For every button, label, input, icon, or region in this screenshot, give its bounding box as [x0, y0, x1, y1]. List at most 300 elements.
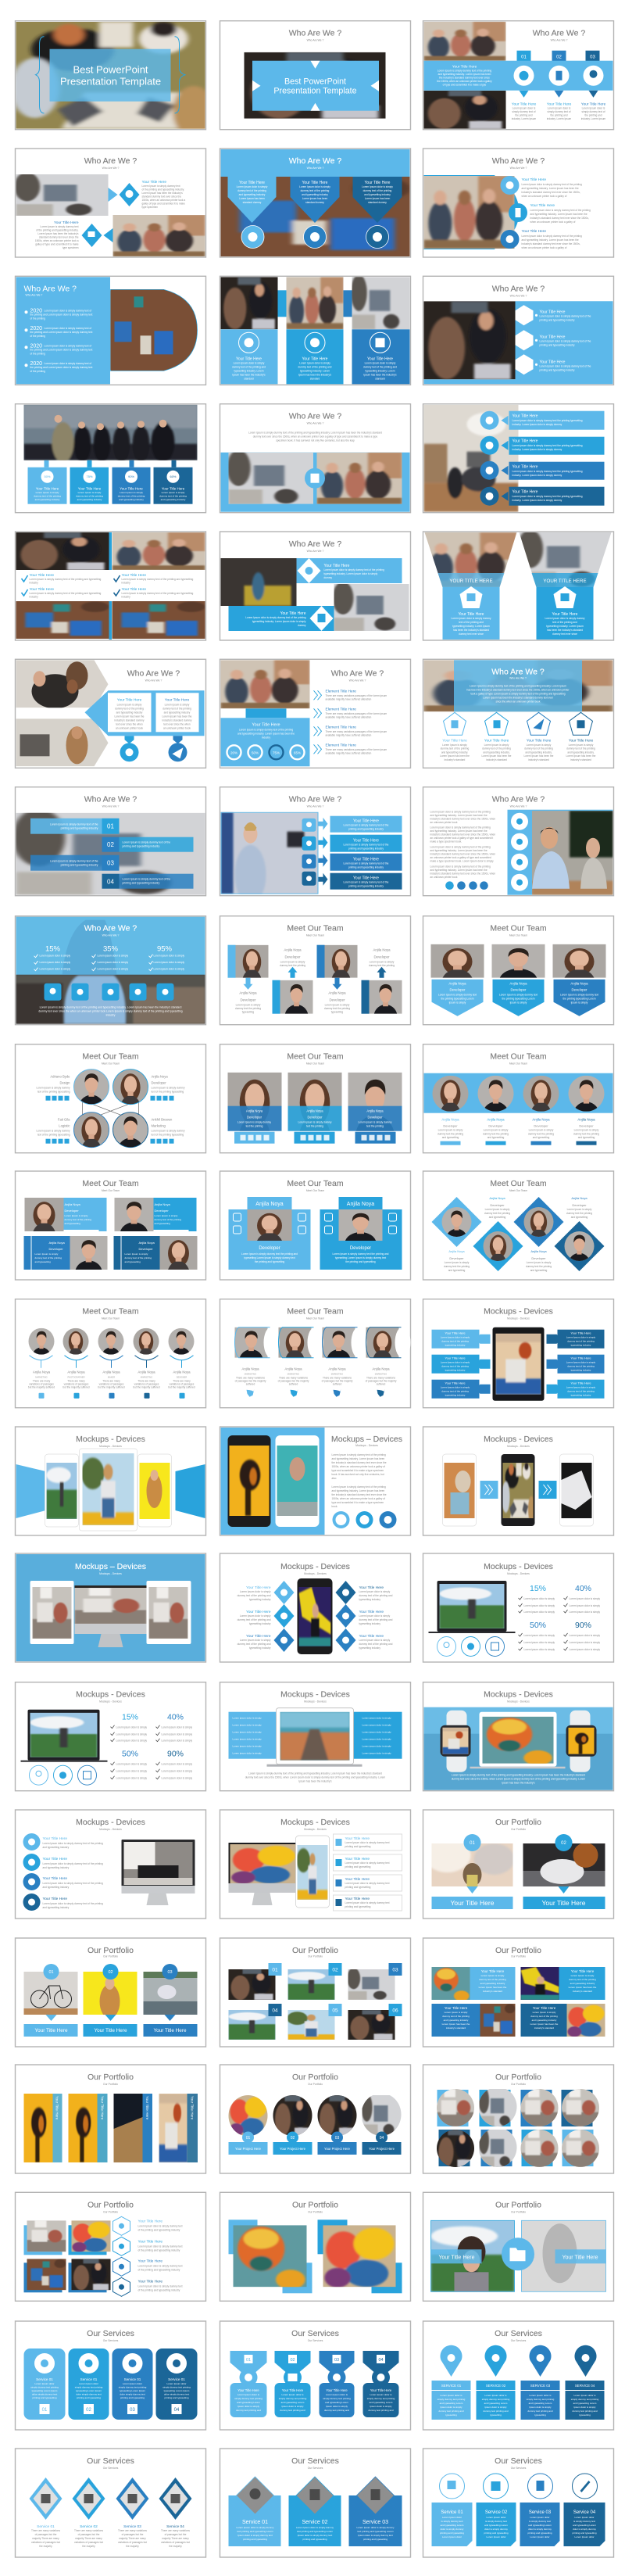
text: Ipsum dolor is simply	[326, 2405, 348, 2408]
percentages	[111, 1713, 192, 1780]
heading: Who Are We ?	[331, 668, 384, 678]
panels: has been the industry's standard	[453, 629, 489, 632]
heading: Who Are We ?	[510, 294, 527, 297]
text: simply dummy text printing	[367, 2397, 395, 2400]
slide 58: services stacked diamonds	[16, 2449, 206, 2557]
slide 44: monitor, phone and checklist cards: printing and typesetting	[345, 1905, 371, 1908]
overlays: Lorem Ipsum is simply dummy	[298, 1121, 332, 1124]
text: and typesetting Lorem	[370, 2401, 393, 2404]
percentages: Lorem ipsum dolor is simply	[569, 1634, 600, 1637]
body: and typesetting industry. Lorem Ipsum has been	[331, 1489, 385, 1492]
blue panel: 2020	[30, 361, 42, 367]
slide 25: four ovals connected	[16, 1044, 206, 1153]
stat cards: Your Title Here	[36, 487, 59, 491]
text: Your Title Here	[539, 310, 566, 314]
description boxes: and typesetting Lorem	[573, 2402, 597, 2405]
blue panel: Lorem Ipsum dolor is simply dummy text of	[44, 309, 91, 312]
checklist band: industry	[122, 596, 130, 599]
heading: Meet Our Team	[82, 1052, 139, 1062]
percent stats: Lorem ipsum dolor is simply	[97, 968, 128, 971]
text: Lorem Ipsum dolor is simply	[240, 1614, 271, 1618]
panels	[438, 573, 598, 640]
heading: Our Portfolio	[308, 1954, 323, 1958]
heading: Meet Our Team	[82, 1307, 139, 1317]
heading: Who Are We ?	[307, 422, 324, 425]
card text	[34, 1202, 181, 1263]
text: Your Title Here	[527, 738, 552, 743]
percentages: Lorem ipsum dolor is simply	[523, 1610, 555, 1614]
text: Service 02	[485, 2510, 508, 2515]
heading: Meet Our Team	[490, 1179, 547, 1188]
slide 21: text, icon column and photo	[423, 787, 614, 896]
captions: and typesetting	[488, 1136, 505, 1139]
round photos	[437, 2087, 599, 2167]
heading: Mockups - Devices	[304, 1572, 327, 1575]
slide 19: numbered bars over photo	[12, 787, 205, 896]
text blocks: 1500s, when an unknown printer took a	[142, 199, 185, 202]
caption: Lorem Ipsum is simply dummy text of the printing and typesetting industry. Lorem Ipsum has been the industry's standard	[452, 1774, 585, 1777]
text: and typesetting industry. Lorem Ipsum has been the	[522, 187, 579, 190]
heading: Mockups - Devices	[484, 1562, 553, 1571]
text: industry's standard dummy text ever since the 1500s,	[522, 191, 580, 194]
captions: Developer	[443, 1124, 458, 1128]
boxes	[330, 816, 402, 890]
step text: the printing and	[516, 114, 533, 117]
text: Your Title Here	[246, 1585, 271, 1590]
step text: simply dummy text of	[512, 110, 536, 113]
list: Your Title Here	[42, 1897, 67, 1901]
checklist band: Your Title Here	[30, 587, 54, 592]
text: Your Title Here	[238, 2388, 259, 2392]
text blocks: Lorem Ipsum is simply dummy text	[40, 225, 79, 228]
stat cards: dummy text of the printing	[159, 495, 187, 498]
captions: of passages but the majority	[366, 1380, 397, 1383]
slide 2: cover variant	[220, 21, 411, 130]
description boxes: Lorem Ipsum dolor is	[529, 2394, 552, 2397]
panels: Ipsum has been the industry's	[232, 373, 266, 376]
slide 44: monitor, phone and checklist cards: Lorem Ipsum dolor is simply dummy text	[345, 1901, 390, 1904]
text: Your Title Here	[359, 1610, 384, 1614]
stat cards	[28, 468, 192, 504]
card text: industry's standard	[483, 1990, 502, 1993]
captions: typesetting Lorem Ipsum is simply dummy text	[335, 1256, 386, 1259]
slide 15: funnel photos	[423, 530, 614, 640]
text: Lorem Ipsum dolor is simply dummy text of the	[539, 339, 591, 342]
panels	[228, 1197, 402, 1270]
text: when an unknown printer took a galley of	[530, 220, 576, 224]
body: Lorem Ipsum is simply dummy text of the printing	[331, 1485, 386, 1489]
slide 33: tablet with six boxes	[423, 1299, 614, 1408]
text: printing and typesetting	[440, 2531, 464, 2535]
captions: Developer	[350, 1246, 371, 1251]
list panels: Lorem ipsum dolor is simply	[233, 1731, 262, 1734]
text: simply dummy text printing	[162, 2386, 191, 2389]
stat cards: Your Title Here	[162, 487, 185, 491]
stat cards: dummy text of the printing	[34, 495, 61, 498]
captions: There are many variations	[366, 1377, 395, 1380]
oval icons	[480, 411, 508, 506]
percent stats: Lorem ipsum dolor is simply	[153, 968, 184, 971]
captions: Anjila Noya	[530, 1249, 547, 1253]
text: dummy text of the printing	[441, 747, 470, 750]
card text: Lorem Ipsum has been the	[530, 2022, 559, 2026]
names: Lorem Ipsum is simply	[370, 961, 395, 964]
captions: dummy text the printing	[438, 1133, 463, 1136]
names: Anjila Noya	[284, 948, 302, 952]
text: dummy text of the printing and	[238, 1643, 271, 1646]
phone	[297, 1578, 333, 1654]
heading: Who Are We ?	[551, 39, 568, 42]
card text: dummy text of the printing	[155, 1218, 181, 1221]
captions: the printing and typesetting	[345, 1260, 376, 1263]
captions: Anjila Noya	[487, 1118, 505, 1122]
overlays: text the printing	[246, 1125, 263, 1128]
stat cards: Your Title Here	[78, 487, 102, 491]
photo	[423, 660, 612, 711]
stat cards: 50%	[44, 475, 51, 478]
bars: printing and typesetting industry	[122, 882, 160, 885]
text: dummy text of the printing and	[359, 1594, 393, 1597]
card text: Lorem Ipsum is simply	[481, 1974, 505, 1977]
captions: and typesetting	[578, 1136, 595, 1139]
body text: Lorem Ipsum dolor is simply dummy text of the printing	[430, 811, 491, 814]
heading: Our Services	[291, 2329, 339, 2338]
captions: Lorem Ipsum is simply dummy	[36, 1130, 70, 1133]
captions: There are many	[67, 1380, 85, 1383]
project bars: Your Project Here	[235, 2147, 262, 2151]
panels: Lorem Ipsum dolor is simply dummy	[451, 617, 491, 620]
text: and typesetting industry.	[483, 751, 510, 754]
photo	[220, 811, 319, 894]
caption: dummy text ever since the when an unknown printer took Lorem Ipsum is simply dummy text of the printing and typesetting	[38, 1010, 183, 1013]
folder icon	[502, 2237, 534, 2270]
percent stats: 95%	[157, 945, 173, 954]
slide 32: arc framed portraits	[220, 1299, 411, 1408]
cards: Your Title Here	[117, 697, 142, 702]
heading: Who Are We ?	[289, 539, 341, 549]
arrows	[244, 967, 386, 990]
laptop	[470, 1712, 566, 1768]
text: simply dummy text printing	[30, 2386, 59, 2389]
step text: industry. Lorem Ipsum	[547, 117, 571, 120]
heading: Meet Our Team	[306, 1317, 324, 1320]
card text: Lorem Ipsum is simply	[533, 2011, 556, 2014]
title box: Best PowerPoint	[73, 64, 148, 76]
text: of passages but the	[35, 2533, 57, 2536]
number tiles: 02	[86, 2408, 91, 2413]
intro text: Lorem Ipsum is simply dummy text of the printing and typesetting industry. Lorem Ipsum has been the industry's standard	[248, 432, 382, 435]
text: printing and typesetting industry	[539, 343, 575, 346]
heading: Meet Our Team	[102, 1062, 120, 1066]
text: dummy text of the printing	[482, 747, 511, 750]
boxes: Your Title Here	[353, 839, 379, 844]
slide 49: portfolio vertical strips	[16, 2065, 206, 2173]
slide 17: photo with donuts and list	[220, 659, 411, 768]
card text: Lorem Ipsum has been the	[479, 1986, 507, 1989]
text	[238, 1585, 393, 1650]
heading: Who Are We ?	[492, 795, 545, 804]
text: Lorem Ipsum dolor	[442, 2516, 462, 2519]
pointers	[45, 2015, 56, 2021]
slide 35: phones on blue panel	[220, 1427, 411, 1535]
number tiles: 01	[42, 2408, 48, 2413]
panels: standard	[244, 377, 254, 380]
list: Your Title Here	[42, 1836, 67, 1841]
names: Anjila Noya	[373, 948, 391, 952]
panels	[228, 2495, 402, 2546]
slide 37: monitor and tablets on blue	[16, 1553, 206, 1662]
text: Your Title Here	[246, 1610, 271, 1614]
box text: Lorem Ipsum dolor is simply	[441, 1386, 470, 1389]
text: Service 04	[573, 2510, 596, 2515]
diamonds	[273, 1581, 356, 1652]
text: industry's standard dummy text ever since the 1500s,	[530, 217, 589, 220]
label bars: SERVICE 01	[441, 2384, 462, 2388]
portraits	[247, 1209, 383, 1241]
heading: Who Are We ?	[102, 167, 120, 170]
number tabs: 02	[332, 1967, 338, 1973]
percentages: Lorem ipsum dolor is simply	[523, 1648, 555, 1651]
blue panel: of the printing	[30, 370, 45, 373]
text: Your Title Here	[530, 203, 555, 208]
list: available majority have suffered alteration	[325, 751, 371, 754]
description boxes: and typesetting Lorem	[484, 2402, 508, 2405]
slide 57: services map pins	[423, 2321, 614, 2430]
text: the majority	[82, 2545, 95, 2548]
list: Element Title Here	[325, 743, 356, 747]
blue panel: 50%	[252, 751, 259, 754]
text: There are many variations	[118, 2529, 147, 2532]
cards: an unknown printer book	[116, 726, 143, 729]
captions	[438, 1118, 599, 1145]
body text: Lorem Ipsum dolor is simply dummy text of the printing	[430, 826, 491, 829]
captions: Lorem Ipsum is simply	[527, 1261, 552, 1264]
list: Your Title Here	[42, 1876, 67, 1881]
pointer panels: Developer	[571, 988, 588, 992]
social bars	[234, 1132, 395, 1144]
photos	[228, 1968, 395, 2040]
watches	[441, 1711, 597, 1772]
number tiles: 04	[378, 2358, 384, 2363]
bars: Your Title Here	[512, 465, 538, 470]
list: available majority have suffered alteration	[325, 733, 371, 736]
slide 44: monitor, phone and checklist cards: Your Title Here	[345, 1836, 370, 1841]
slide 45: portfolio two items	[423, 1810, 614, 1919]
boxes: Lorem Ipsum is simply dummy text of the	[344, 881, 389, 884]
step text: the printing and	[551, 114, 568, 117]
percentages: Lorem ipsum dolor is simply	[116, 1763, 147, 1766]
heading: Our Services	[511, 2339, 527, 2342]
pointer panels: the printing typesetting Lorem	[441, 998, 474, 1001]
text: Service 01	[124, 2377, 141, 2381]
text: Service 01	[36, 2377, 53, 2381]
arrow panel	[84, 690, 205, 736]
text: Lorem Ipsum dolor	[79, 2382, 98, 2385]
description boxes: dummy text printing and	[572, 2409, 598, 2413]
heading: Mockups - Devices	[76, 1690, 145, 1700]
heading: Our Portfolio	[292, 2200, 338, 2209]
panels	[220, 329, 409, 384]
pointers: and typesetting industry	[302, 193, 328, 196]
boxes: printing and typesetting industry	[348, 847, 384, 851]
card text: industry's standard	[534, 2026, 554, 2030]
step text: Lorem Ipsum dolor is	[548, 107, 571, 110]
text: Service 04	[166, 2524, 184, 2529]
photos	[233, 2225, 395, 2289]
captions: and typesetting	[489, 1216, 506, 1219]
text: There are many variations	[31, 2529, 60, 2532]
text: and typesetting Lorem	[573, 2524, 596, 2527]
text: Your Title Here	[539, 335, 566, 339]
number badges: 02	[561, 1841, 566, 1846]
cards: Lorem Ipsum has been the	[115, 715, 145, 718]
text: simply dummy text printing	[279, 2397, 307, 2400]
number tiles: 03	[334, 2358, 339, 2363]
text: majority There are many	[119, 2537, 146, 2540]
captions: Anjila Noya	[577, 1118, 595, 1122]
rounded photo	[423, 175, 519, 249]
body: the industry's standard dummy text ever since the	[331, 1461, 387, 1464]
text: Lorem Ipsum dolor	[486, 2516, 506, 2519]
card text: Your Title Here	[533, 2006, 556, 2010]
text: dummy text of the printing	[524, 747, 553, 750]
captions: MARKETING	[288, 1373, 299, 1376]
description boxes: simply dummy text printing	[438, 2398, 466, 2401]
step text: Your Title Here	[547, 102, 572, 107]
list: Lorem Ipsum dolor is simply dummy text of the printing	[42, 1882, 103, 1885]
list panels: Lorem ipsum dolor is simply	[233, 1717, 262, 1720]
body text: and typesetting industry. Lorem Ipsum has been the	[430, 869, 488, 872]
list: Element Title Here	[325, 707, 356, 711]
box text: typesetting industry	[571, 1394, 591, 1397]
text	[31, 2524, 190, 2548]
description boxes: Lorem Ipsum dolor is	[573, 2394, 596, 2397]
text: typesetting industry	[359, 1646, 380, 1650]
columns	[23, 2348, 197, 2420]
body text: Lorem Ipsum dolor is simply dummy text of the printing	[430, 846, 491, 849]
list: There are many variations passages of the lorem ipsum	[325, 694, 388, 697]
captions: Developer	[488, 1124, 503, 1128]
photos	[23, 2094, 188, 2162]
boxes: printing and typesetting industry	[348, 828, 384, 831]
text: industry's standard	[486, 758, 507, 761]
card text: Your Title Here	[571, 1969, 595, 1973]
card text: Lorem Ipsum is simply	[445, 2011, 468, 2014]
rounded photo	[111, 289, 197, 371]
caption: industry	[106, 1014, 116, 1017]
blue panel: Who Are We ?	[23, 284, 77, 293]
heading: Who Are We ?	[307, 805, 324, 808]
text: Lorem Ipsum dolor is simply	[359, 1639, 391, 1642]
cards: and typesetting industry	[116, 711, 143, 714]
overlay: Who Are We ?	[491, 667, 545, 676]
panels: typesetting industry. Lorem Ipsum	[452, 625, 490, 628]
laptop	[267, 1708, 362, 1767]
icons	[500, 176, 527, 249]
text: Lorem Ipsum is simply	[527, 743, 552, 747]
text: dummy text of the printing and	[359, 1618, 393, 1621]
outline icons	[30, 1765, 97, 1785]
slide 22: stats over photo	[16, 916, 206, 1025]
slide 44: monitor, phone and checklist cards: Your Title Here	[345, 1857, 370, 1861]
stat cards: 90%	[128, 475, 134, 478]
text: Lorem Ipsum dolor	[530, 2535, 550, 2538]
text: Your Title Here	[138, 2219, 162, 2223]
text: the majority	[169, 2545, 182, 2548]
text: printing and typesetting	[302, 2538, 327, 2541]
pins	[441, 2345, 597, 2377]
percent stats: Lorem ipsum dolor is simply	[153, 961, 184, 964]
percent stats: 15%	[45, 945, 61, 954]
pointer panels: Anjila Noya	[509, 982, 527, 986]
stat cards: Your Title Here	[120, 487, 143, 491]
slide 9: photo with hexagons	[423, 276, 614, 385]
slide 59: services three panels	[220, 2449, 411, 2557]
text: Service 03	[529, 2510, 552, 2515]
title box: Presentation Template	[60, 76, 161, 88]
text: variations of passages but	[74, 2541, 103, 2544]
heading: Who Are We ?	[492, 156, 545, 166]
box text: typesetting industry	[445, 1394, 466, 1397]
blue bars: Your Title Here	[323, 564, 350, 568]
slide 8: three photo columns	[220, 274, 411, 385]
text: of passages but the	[165, 2533, 187, 2536]
pointers: Lorem Ipsum has been	[302, 197, 328, 200]
bars: printing and typesetting industry	[61, 864, 98, 867]
text: of the printing and typesetting industry	[138, 2288, 180, 2291]
heading: Meet Our Team	[509, 1189, 527, 1192]
percent stats: Lorem ipsum dolor is simply	[39, 968, 70, 971]
tablets	[30, 1581, 191, 1644]
card text: Lorem Ipsum is simply	[155, 1214, 178, 1217]
text: Service 01	[37, 2524, 55, 2529]
bars: industry. Lorem Ipsum dolor is simply dummy	[512, 474, 562, 477]
caption: Ipsum has been the industry's	[298, 1780, 332, 1783]
overlays	[431, 2249, 606, 2263]
monitor	[228, 1843, 297, 1905]
slide 16: arrow panel with photos	[16, 659, 206, 768]
card text: industry's standard	[573, 1990, 592, 1993]
text: of the printing and typesetting industry	[138, 2268, 180, 2271]
text: and typesetting industry.	[567, 751, 595, 754]
text: Your Title Here	[522, 177, 546, 182]
text: Your Title Here	[359, 1634, 384, 1639]
captions: MAKER	[108, 1376, 115, 1379]
description boxes: Ipsum dolor is simply	[484, 2406, 507, 2409]
description boxes: dummy text printing and	[483, 2409, 509, 2413]
step text: industry. Lorem Ipsum	[512, 117, 536, 120]
card text: industry's standard	[446, 2026, 466, 2030]
pointer panels: Developer	[510, 988, 527, 992]
bars: 04	[107, 879, 114, 886]
slide 30: diamond portraits	[423, 1171, 614, 1280]
blue overlay: Who Are We ?	[84, 924, 137, 933]
body text: and typesetting industry. Lorem Ipsum has been the	[430, 829, 488, 833]
heading: Who Are We ?	[102, 805, 120, 808]
captions: and typesetting	[442, 1136, 459, 1139]
text: of passages but the	[122, 2533, 144, 2536]
checklist band: Your Title Here	[122, 573, 146, 578]
heading: Mockups - Devices	[507, 1700, 530, 1704]
blue panel: the printing and Lorem Ipsum dolor is simply dummy text	[30, 331, 93, 334]
list: Lorem Ipsum dolor is simply dummy text of the printing	[42, 1862, 103, 1865]
bars: printing and typesetting industry	[61, 827, 98, 830]
description boxes: typesetting	[490, 2413, 502, 2417]
heading: Our Portfolio	[292, 1946, 338, 1955]
text: printing and typesetting	[484, 2531, 509, 2535]
text: Lorem Ipsum dolor is simply dummy text	[138, 2284, 183, 2288]
text: is simply dummy text	[441, 2520, 463, 2523]
